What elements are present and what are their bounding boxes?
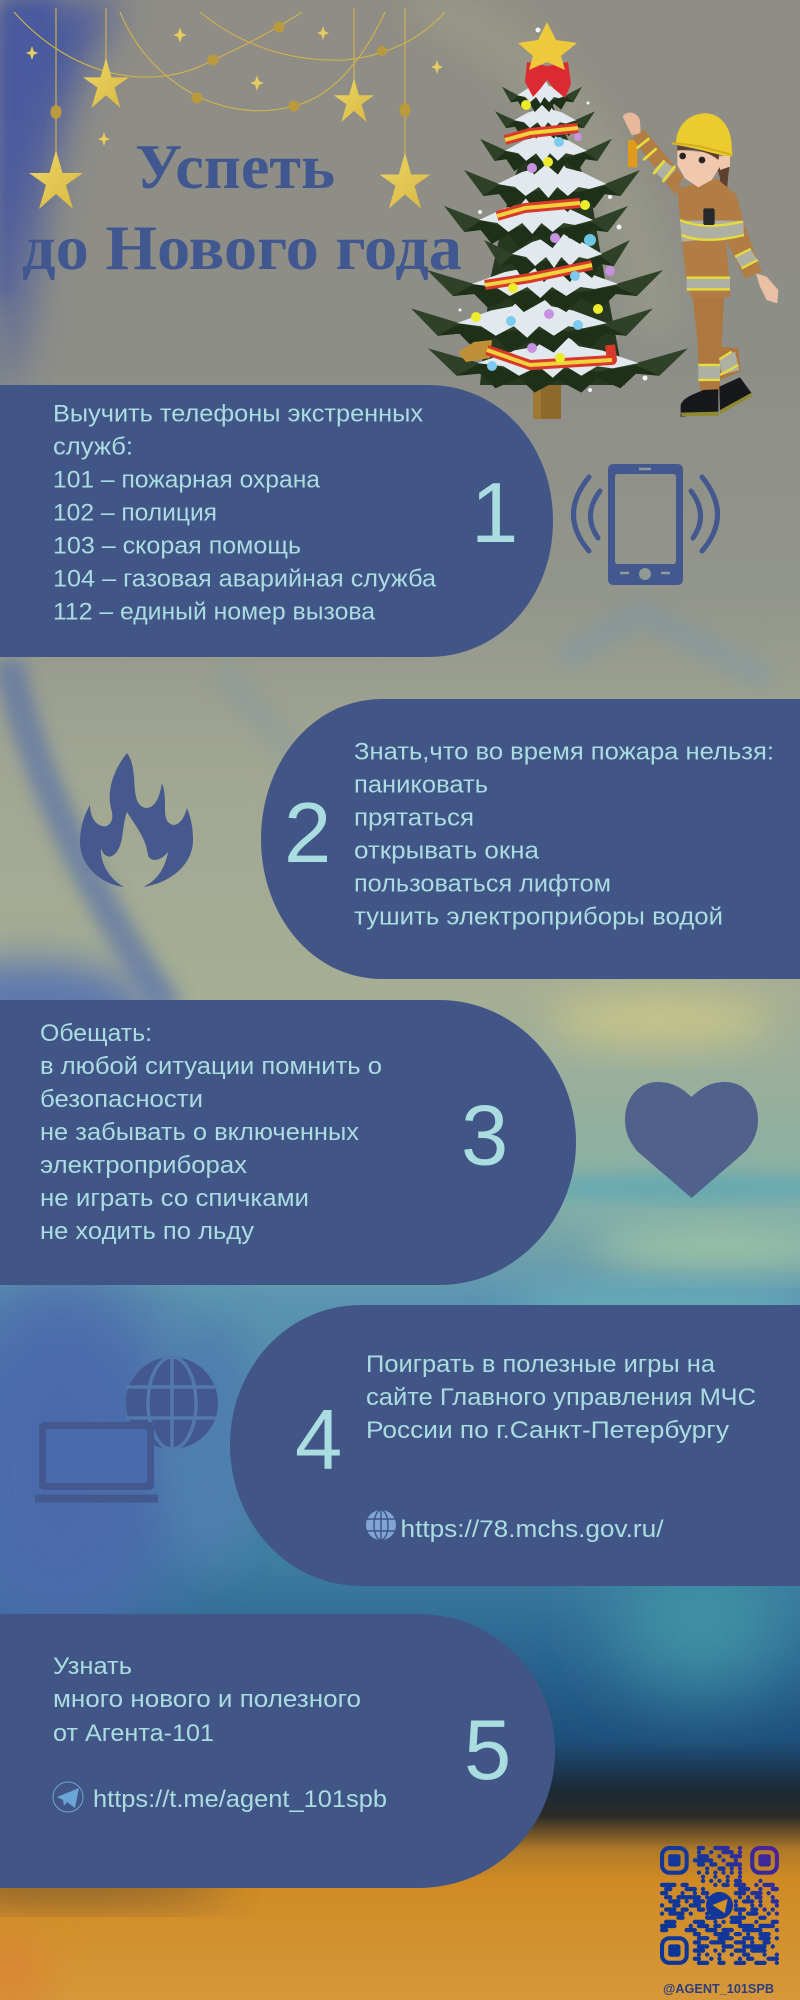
text block 2: тушить электроприборы водой xyxy=(354,904,723,930)
text block 3: в любой ситуации помнить о xyxy=(40,1053,382,1080)
icon: flame xyxy=(80,753,193,887)
number 2: 2 xyxy=(284,786,331,881)
QR code xyxy=(662,1848,777,1963)
text block 1: Выучить телефоны экстренных xyxy=(53,400,423,428)
icon: telegram xyxy=(53,1782,83,1812)
text block 5: много нового и полезного xyxy=(53,1686,361,1713)
jacket xyxy=(677,178,762,298)
text block 4: Поиграть в полезные игры на xyxy=(366,1351,715,1378)
text block 5: Узнать xyxy=(53,1653,132,1680)
link: https://78.mchs.gov.ru/ xyxy=(400,1516,664,1543)
text block 3: безопасности xyxy=(40,1086,203,1113)
text block 4: сайте Главного управления МЧС xyxy=(366,1384,756,1411)
text block 3: не ходить по льду xyxy=(40,1218,255,1245)
number 4: 4 xyxy=(295,1393,342,1488)
text block 3: не играть со спичками xyxy=(40,1185,309,1212)
text block 5: от Агента-101 xyxy=(53,1720,214,1747)
legs xyxy=(693,297,741,391)
baubles xyxy=(471,100,615,371)
text block 3 xyxy=(40,1020,382,1245)
ribbons xyxy=(485,128,612,365)
text block 5 xyxy=(53,1653,361,1747)
text block 2: паниковать xyxy=(354,772,488,798)
text block 3: Обещать: xyxy=(40,1020,152,1047)
text block 2: пользоваться лифтом xyxy=(354,870,611,898)
text block 1: 101 – пожарная охрана xyxy=(53,466,320,494)
number 5: 5 xyxy=(464,1703,511,1798)
panel 2: fire rules xyxy=(261,699,800,979)
panel 5: agent-101 xyxy=(0,1614,555,1888)
text block 2: Знать,что во время пожара нельзя: xyxy=(354,738,774,766)
text block 4 xyxy=(366,1351,756,1444)
boots xyxy=(681,389,718,417)
link: https://t.me/agent_101spb xyxy=(93,1786,387,1813)
icon: phone xyxy=(574,464,718,585)
bow xyxy=(525,62,571,98)
helmet xyxy=(672,113,732,157)
panel 1: emergency phones xyxy=(0,385,553,657)
title: Успеть xyxy=(135,131,335,202)
arm xyxy=(633,129,683,195)
icon: heart xyxy=(625,1082,758,1198)
text block 2 xyxy=(354,738,774,930)
text block 1: 103 – скорая помощь xyxy=(53,532,301,560)
ponytail xyxy=(717,162,730,195)
christmas tree xyxy=(411,22,688,419)
tree star xyxy=(518,22,577,70)
sparkle dots xyxy=(458,28,648,392)
title xyxy=(22,131,462,283)
text block 1: 104 – газовая аварийная служба xyxy=(53,566,436,592)
text block 2: открывать окна xyxy=(354,838,539,864)
orange patch xyxy=(458,340,492,362)
text block 1: служб: xyxy=(53,434,133,460)
face xyxy=(677,150,720,187)
text block 1: 102 – полиция xyxy=(53,500,217,526)
text block 1 xyxy=(53,400,436,626)
title: до Нового года xyxy=(22,212,462,283)
icon: globe and laptop xyxy=(35,1357,218,1502)
QR caption: @AGENT_101SPB xyxy=(663,1982,774,1996)
text block 4: России по г.Санкт-Петербургу xyxy=(366,1417,730,1444)
raised hand and lantern xyxy=(623,113,641,135)
text block 3: электроприборах xyxy=(40,1152,247,1179)
garlands and hanging stars xyxy=(14,8,445,209)
icon: small globe xyxy=(366,1510,396,1540)
text block 3: не забывать о включенных xyxy=(40,1119,359,1146)
lower hand xyxy=(756,273,778,303)
number 1: 1 xyxy=(471,466,518,561)
panel 3: promises xyxy=(0,1000,576,1285)
text block 1: 112 – единый номер вызова xyxy=(53,598,375,626)
firefighter character xyxy=(623,113,778,417)
text block 2: прятаться xyxy=(354,804,474,832)
panel 4: games xyxy=(230,1305,800,1586)
number 3: 3 xyxy=(461,1088,508,1184)
